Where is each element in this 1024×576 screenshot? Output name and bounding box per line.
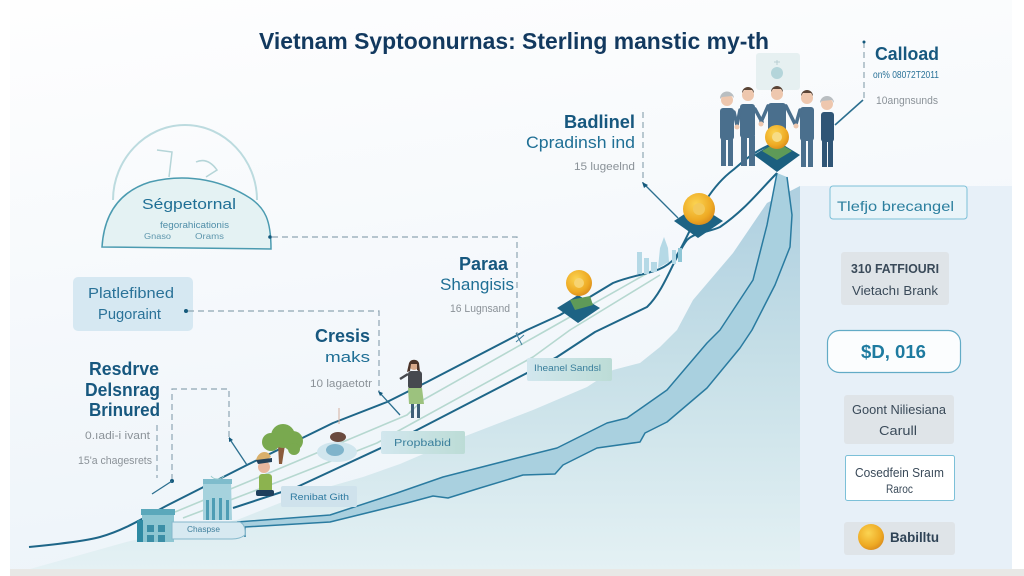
text block: Crests: 10 lagaetotr: [310, 378, 372, 390]
text block: Badlinel: 15 lugeelnd: [574, 161, 635, 173]
panel: Tlefjo brecangel: Tlefjo brecangel: [837, 198, 954, 214]
panel: 310 Fatfiouri: [841, 252, 949, 305]
text block: Calload: [873, 44, 939, 107]
panel: Cosedfein Sraim: Raroc: [886, 484, 913, 496]
text block: Calload: Calload: [875, 44, 939, 64]
panel: 310 Fatfiouri: Vietachı Brank: [852, 284, 939, 298]
panel: Babilltu: Babilltu: [890, 530, 939, 545]
icon: tree: [262, 424, 303, 464]
text block: Para Shangisis: Paraa: [459, 254, 509, 274]
panel: segmental dome: Ségpetornal: [142, 196, 236, 213]
text block: Para Shangisis: 16 Lugnsand: [450, 303, 510, 315]
chart: ascending trend lines: [29, 142, 777, 547]
connector: Calload arrow: [835, 40, 866, 125]
connector: Badlinel arrow: [642, 112, 678, 218]
text block: Crests: maks: [325, 349, 370, 366]
panel: Platefibned Pugoraint: Pugoraint: [98, 306, 162, 323]
text block: Badlinel: [526, 112, 635, 173]
icon: person with hat: [256, 452, 274, 496]
label: Iheanel Sandsl: [527, 358, 612, 381]
icon: faded card behind team: [756, 53, 800, 90]
label: Chaspse: Chaspse: [187, 525, 221, 534]
panel: Tlefjo brecangel: [830, 186, 967, 219]
text block: Resdrve Delsnrag Brinured: Brinured: [89, 400, 160, 420]
chart: deep river band in slope: [237, 173, 792, 537]
panel: segmental dome: fegorahicationis: [160, 220, 230, 230]
icon: top platform and coin: [754, 125, 800, 172]
connector: Platefibned to Crests arrow: [184, 309, 400, 415]
icon: tall bank building: [203, 476, 232, 520]
connector: dome to Para: [268, 235, 524, 345]
icon: lower platform and coin: [557, 270, 600, 323]
panel: value: [828, 330, 960, 372]
panel: Goont Niliesiana: Carull: [879, 423, 917, 438]
icon: small bank building: [137, 509, 175, 542]
label: Propbabid: Propbabid: [394, 438, 451, 449]
text block: Resdrve Delsnrag Brinured: 0.ıadi-i ivant: [85, 430, 150, 442]
panel: Babilltu: [844, 522, 955, 555]
text block: Resdrve Delsnrag Brinured: 15'a chagesrets: [78, 455, 152, 467]
text block: Badlinel: Cpradinsh ind: [526, 133, 635, 152]
icon: water bowl: [317, 408, 357, 462]
text block: Para Shangisis: [440, 254, 514, 315]
text block: Para Shangisis: Shangisis: [440, 275, 514, 294]
panel: segmental dome: Gnaso: [144, 232, 172, 241]
panel: Goont Niliesiana: Goont Niliesiana: [852, 402, 947, 417]
panel: Cosedfein Sraim: Cosedfein Sraım: [855, 466, 944, 480]
icon: middle platform and coin: [674, 193, 723, 238]
text block: Badlinel: Badlinel: [564, 112, 635, 132]
icon: skyline: [637, 237, 682, 274]
panel: Platefibned Pugoraint: Platlefibned: [88, 285, 174, 302]
panel: Cosedfein Sraim: [846, 456, 954, 500]
panel: value: $D, 016: [861, 342, 926, 362]
text block: Resdrve Delsnrag Brinured: [78, 359, 160, 467]
text block: Crests: Cresis: [315, 326, 370, 346]
panel: segmental dome: [102, 125, 271, 249]
panel: Platefibned Pugoraint: [73, 277, 193, 331]
text block: Crests: [310, 326, 372, 390]
panel: 310 Fatfiouri: 310 FATFIOURI: [851, 262, 939, 276]
label: Renibat Gith: [281, 486, 357, 507]
panel: Goont Niliesiana: [844, 395, 954, 444]
icon: woman walking: [400, 360, 424, 418]
text block: Resdrve Delsnrag Brinured: Delsnrag: [85, 380, 160, 400]
text block: Calload: on% 08072T2011: [873, 70, 939, 81]
connector: Resdrve arrow: [152, 389, 247, 494]
panel: right sidebar background: [800, 186, 1012, 569]
label: Propbabid: [381, 431, 465, 454]
panel: segmental dome: Orams: [195, 232, 224, 241]
text block: Calload: 10angnsunds: [876, 95, 938, 107]
area chart: mountain slope: [30, 186, 800, 569]
label: Iheanel Sandsl: Iheanel Sandsl: [534, 363, 601, 373]
label: Renibat Gith: Renibat Gith: [290, 492, 349, 502]
icon: team of people: [720, 86, 834, 167]
text block: Resdrve Delsnrag Brinured: Resdrve: [89, 359, 159, 379]
title: Vietnam Syptoonurnas: Sterling manstic my-th: [259, 28, 769, 54]
label: Chaspse: [172, 522, 245, 539]
